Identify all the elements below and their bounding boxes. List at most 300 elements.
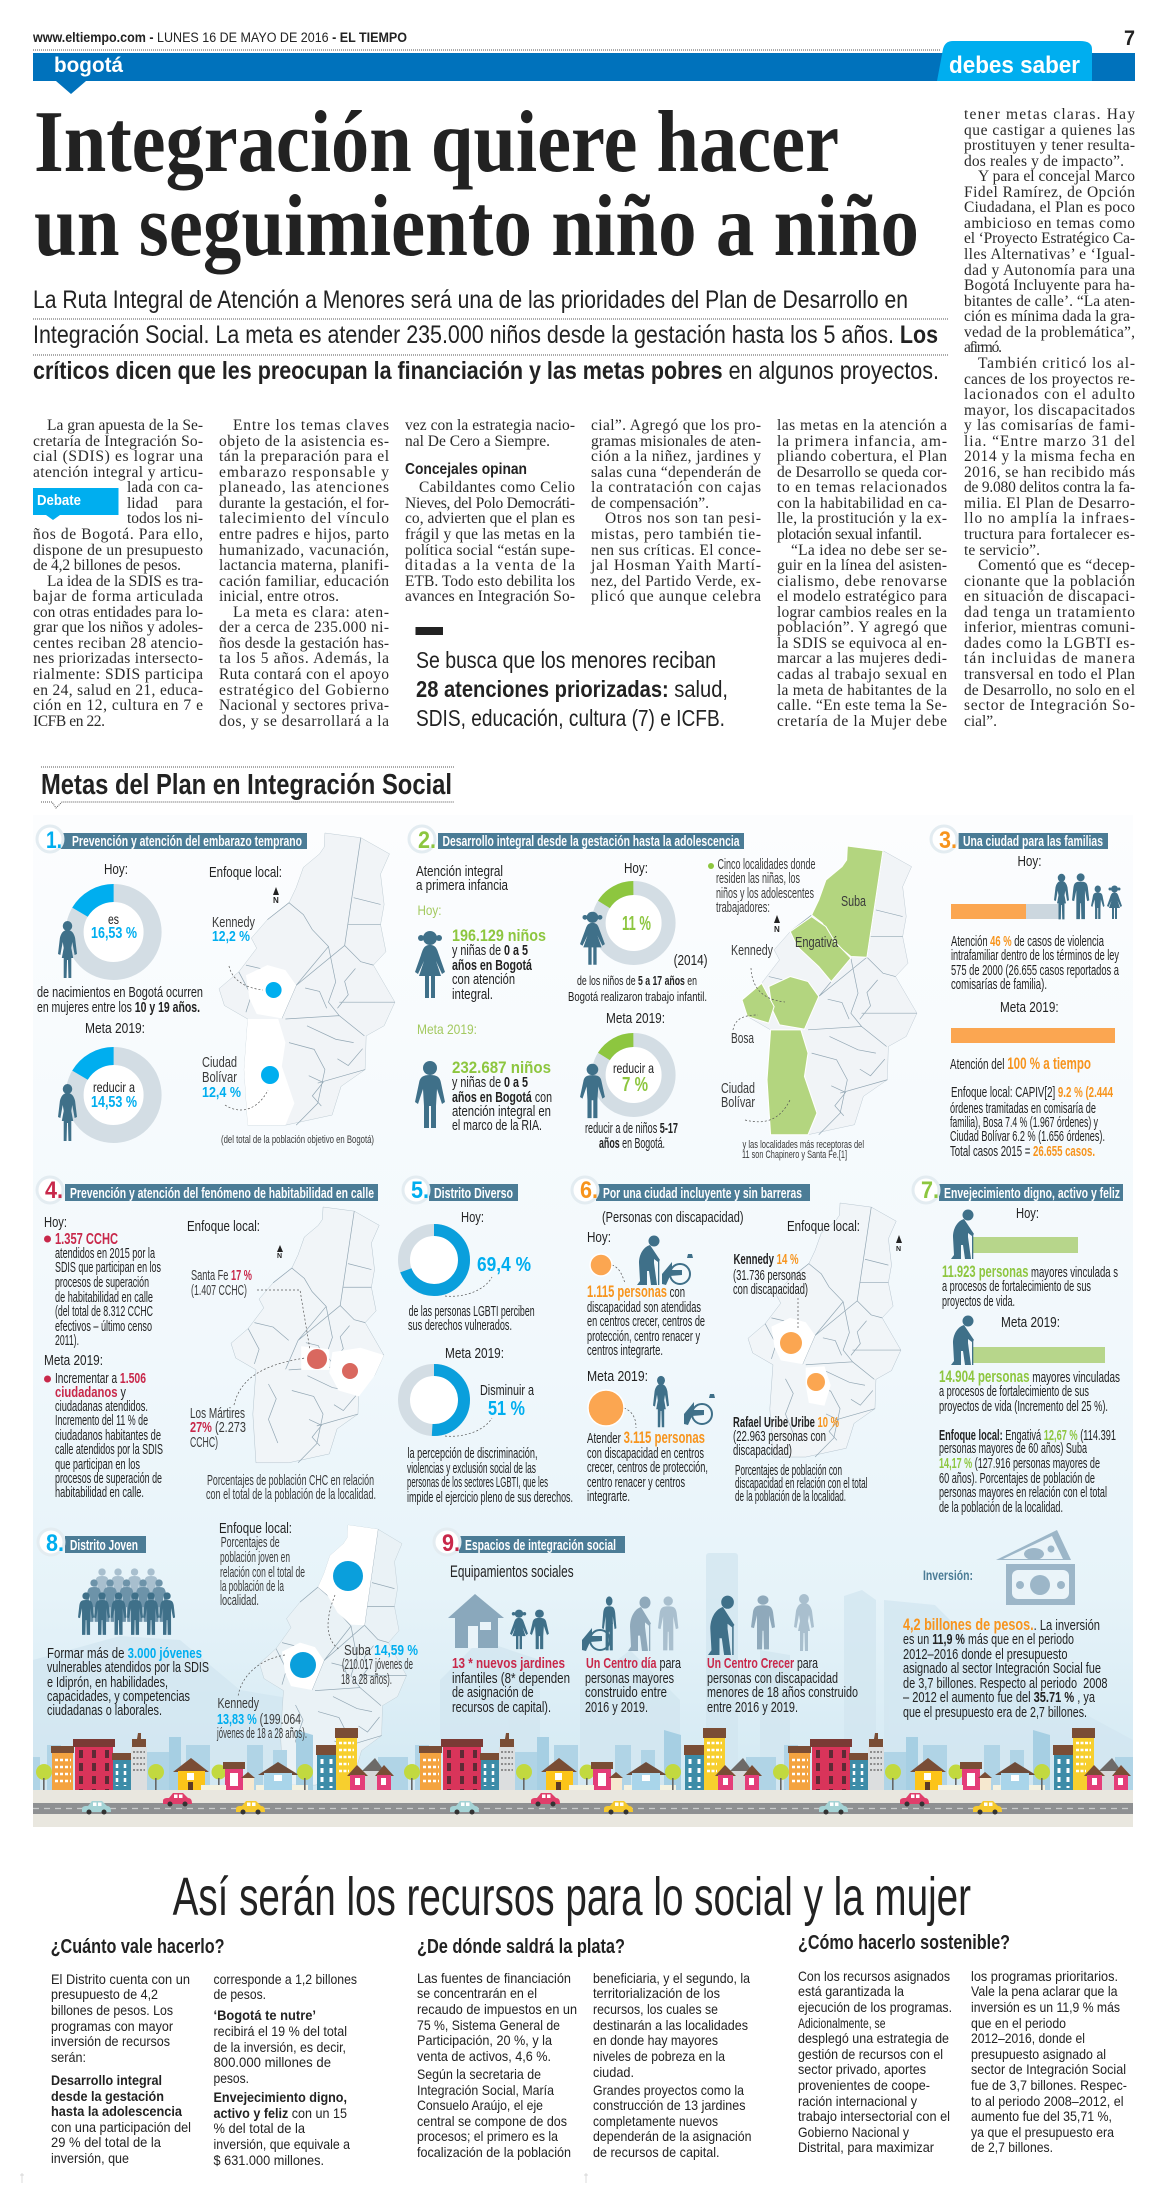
icon: house (448, 1594, 504, 1648)
article column 6: el ‘Proyecto Estratégico Ca- (964, 230, 1135, 247)
block: ¿Cómo hacerlo sostenible?: inversión es un 11,9 % más (971, 1999, 1120, 2015)
article column 2: Entre los temas claves (233, 417, 389, 434)
panel 9 text: personas con discapacidad (707, 1670, 838, 1687)
panel 8 header: Distrito Joven (70, 1538, 138, 1554)
donut hoy 11 %: 11 % (622, 913, 651, 935)
block: ¿De dónde saldrá la plata? (417, 1936, 752, 2160)
panel 8 map labels (216, 1520, 418, 1742)
panel 2 header: Desarrollo integral desde la gestación hasta la adolescencia (442, 834, 740, 850)
text: hoy y meta: calle atendidos por la SDIS (55, 1442, 163, 1458)
panel 6 text: protección, centro renacer y (587, 1329, 700, 1345)
panel 3 header: Una ciudad para las familias (963, 834, 1103, 850)
map labels: y las localidades más receptoras del (742, 1139, 864, 1151)
panel 6 text: discapacidad en relación con el total (735, 1476, 868, 1492)
panel 4 header: 4. (45, 1177, 63, 1204)
block: ¿Cómo hacerlo sostenible?: provenientes de coope- (798, 2077, 930, 2093)
block: ¿De dónde saldrá la plata?: recaudo de impuestos en un (417, 2001, 577, 2017)
article column 6: que castigar a quienes las (964, 122, 1135, 139)
icon: wheelchair (662, 1254, 693, 1285)
text: hoy y meta: 1.357 CCHC (55, 1231, 118, 1248)
panel 1 header: Prevención y atención del embarazo temprano (72, 834, 302, 850)
article column 5: lograr cambios reales en la (777, 604, 947, 621)
map labels: Bosa (731, 1030, 754, 1047)
article column 2: embarazo responsable y (219, 464, 389, 481)
article column 6: prostituyen y tener resulta- (964, 137, 1135, 154)
article column 4: cial”. Agregó que los pro- (591, 417, 761, 434)
panel 9 header: 9. (442, 1530, 460, 1557)
block: ¿Cómo hacerlo sostenible?: desplegó una estrategia de (798, 2030, 949, 2046)
map labels: Kennedy (731, 942, 773, 959)
donut meta 14,53 %: reducir a (93, 1080, 135, 1095)
text: hoy y meta: efectivos – último censo (55, 1319, 152, 1335)
article column 3: ditadas a la venta de la (405, 557, 575, 574)
article column 4: salas cuna “dependerán de (591, 464, 761, 481)
block: ¿De dónde saldrá la plata?: Integración Social, María (417, 2082, 554, 2098)
article column 1: La idea de la SDIS es tra- (47, 573, 203, 590)
panel 6 text: 1.115 personas con (587, 1282, 685, 1301)
text: formar jóvenes: ciudadanas o laborales. (47, 1702, 162, 1719)
panel 7 text: de la población de la localidad. (939, 1500, 1063, 1516)
article column 4: mistas, pero también tie- (591, 526, 761, 543)
tag: Debate: Debate (37, 492, 81, 509)
inversión text: es un 11,9 % más que en el periodo (903, 1631, 1074, 1648)
text: hoy y meta: de habitabilidad en calle (55, 1290, 153, 1306)
donut meta 14,53 %: 14,53 % (91, 1094, 137, 1111)
map labels: 12,4 % (202, 1085, 241, 1101)
panel 7 text: Enfoque local: Engativá 12,67 % (114.391 (939, 1428, 1116, 1444)
donut meta 7 % (585, 1027, 682, 1123)
bar hoy 46 % (951, 904, 1061, 919)
article column 2: durante la gestación, el for- (219, 495, 389, 512)
circle hoy (590, 1254, 612, 1276)
primera infancia text: Hoy: (418, 902, 442, 918)
block: ¿Cuánto vale hacerlo?: presupuesto de 4,2 (51, 1986, 158, 2002)
block: ¿Cuánto vale hacerlo?: corresponde a 1,2 billones (214, 1971, 357, 1987)
north arrow: N (277, 1253, 282, 1260)
article column 4 (590, 417, 761, 605)
subhead: La Ruta Integral de Atención a Menores será una de las prioridades del Plan de Desarrollo en (33, 286, 908, 314)
trabajo infantil text: Hoy: (624, 860, 648, 877)
block: ¿Cuánto vale hacerlo? (51, 1936, 357, 2168)
map labels: con el total de la población de la localidad. (206, 1487, 376, 1503)
panel 1 text block: de nacimientos en Bogotá ocurren (37, 985, 203, 1001)
article column 6: Bogotá Incluyente para ha- (964, 277, 1135, 294)
block: ¿De dónde saldrá la plata?: construcción de 13 jardines (593, 2097, 746, 2113)
article column 3: vez con la estrategia nacio- (405, 417, 575, 434)
primera infancia text: Meta 2019: (417, 1021, 477, 1037)
map labels: residen las niñas, los (716, 871, 800, 887)
donut meta 7 %: reducir a (613, 1060, 654, 1076)
article column 6: cial”. (964, 713, 997, 730)
article column 3: política social “están supe- (405, 542, 575, 559)
article column 1: cial (SDIS) es lograr una (33, 448, 203, 465)
panel 1 text block: en mujeres entre los 10 y 19 años. (37, 1000, 200, 1016)
text: hoy y meta: atendidos en 2015 por la (55, 1246, 156, 1262)
article column 1: lada con ca- (127, 479, 203, 496)
subheading: Concejales opinan: Concejales opinan (405, 461, 527, 478)
block: ¿Cuánto vale hacerlo?: de la inversión, es decir, (214, 2039, 346, 2055)
icon: group of young people (78, 1568, 175, 1635)
article column 6: dad y Autonomía para una (964, 262, 1135, 279)
panel 3 text: comisarías de familia). (951, 977, 1047, 993)
map labels: Kennedy (212, 915, 256, 931)
panel 6 text: con discapacidad) (733, 1282, 808, 1298)
panel 9 text: Un Centro Crecer para (707, 1655, 818, 1672)
panel 6 text: (Personas con discapacidad) (602, 1209, 744, 1226)
panel 6 header (572, 1177, 810, 1204)
panel 3 text: Atención del 100 % a tiempo (950, 1054, 1091, 1073)
block: ¿Cómo hacerlo sostenible?: Distrital, para maximizar (798, 2139, 934, 2155)
panel 4 header: Prevención y atención del fenómeno de habitabilidad en calle (70, 1186, 374, 1202)
article column 2: talecimiento del vínculo (219, 510, 389, 527)
article column 6: de Desarrollo, no solo en el (964, 682, 1135, 699)
north arrow: N (896, 1246, 901, 1253)
panel 8 map labels: población joven en (220, 1550, 290, 1566)
panel 9 text: 13 * nuevos jardines (452, 1655, 565, 1672)
panel 9 header: Espacios de integración social (465, 1538, 616, 1554)
block: ¿Cómo hacerlo sostenible?: presupuesto asignado al (971, 2046, 1106, 2062)
panel 9 text: de asignación de (452, 1684, 534, 1701)
town: buildings, trees and cars (0, 1728, 1145, 1814)
subhead: Integración Social. La meta es atender 235.000 niños desde la gestación hasta los 5 años. Los (33, 321, 938, 349)
panel 5 text: impide el ejercicio pleno de sus derechos. (407, 1490, 573, 1506)
article column 2 (219, 417, 389, 730)
article column 6: de 9.080 delitos contra la fa- (964, 479, 1135, 496)
primera infancia text: a primera infancia (416, 878, 509, 894)
map labels: 12,2 % (212, 929, 250, 945)
block: ¿Cómo hacerlo sostenible?: Vale la pena aclarar que la (971, 1983, 1118, 1999)
panel 1 text block: Meta 2019: (85, 1020, 145, 1037)
headline: un seguimiento niño a niño (34, 178, 919, 275)
section band: bogotá: bogotá (54, 54, 123, 77)
icon: woman (58, 921, 77, 978)
text: hoy y meta: (del total de 8.312 CCHC (55, 1304, 153, 1320)
panel 6 text: discapacidad son atendidas (587, 1300, 701, 1316)
inversión text: que el presupuesto era de 2,7 billones. (903, 1704, 1087, 1721)
article column 2: der a cerca de 235.000 ni- (219, 619, 389, 636)
block: ¿Cómo hacerlo sostenible?: 2012–2016, donde el (971, 2030, 1085, 2046)
primera infancia text: Atención integral (416, 864, 503, 880)
primera infancia text (416, 864, 552, 1134)
block: ¿Cómo hacerlo sostenible?: los programas prioritarios. (971, 1968, 1118, 1984)
block: ¿Cómo hacerlo sostenible?: de 2,7 billones. (971, 2139, 1053, 2155)
donut meta 14,53 % (60, 1042, 167, 1148)
panel 8 map labels: Kennedy (218, 1696, 260, 1712)
block: ¿Cuánto vale hacerlo?: inversión, que (51, 2150, 129, 2166)
text: hoy y meta: ciudadanas atendidos. (55, 1399, 148, 1415)
block: ¿De dónde saldrá la plata?: niveles de pobreza en la (593, 2048, 725, 2064)
subhead: críticos dicen que les preocupan la financiación y las metas pobres en algunos proyectos. (33, 357, 939, 385)
article column 1: centes reciban 28 atencio- (33, 635, 203, 652)
article column 6: dos reales y de impacto”. (964, 153, 1124, 170)
infographic background (33, 815, 1133, 1790)
article column 1: nes priorizadas intersecto- (33, 650, 203, 667)
trabajo infantil text: Meta 2019: (606, 1010, 665, 1027)
article column 2: lactancia materna, planifi- (219, 557, 389, 574)
article column 1: ICFB en 22. (33, 713, 105, 730)
panel 8 header: 8. (46, 1530, 64, 1557)
map labels: Enfoque local: (187, 1218, 260, 1235)
article column 1: de 4,2 billones de pesos. (33, 557, 181, 574)
text: formar jóvenes: vulnerables atendidos por la SDIS (47, 1659, 209, 1676)
article column 6: milia. El Plan de Desarro- (964, 495, 1135, 512)
panel 3 text: Meta 2019: (1000, 999, 1059, 1016)
inversión heading: Inversión: (923, 1567, 973, 1583)
callout: Se busca que los menores reciban (416, 647, 716, 673)
panel 8 header (38, 1529, 146, 1557)
icon: wheelchair user (684, 1394, 715, 1425)
article column 1: para (176, 495, 203, 512)
donut hoy 16,53 % (60, 879, 167, 985)
article column 6: Fidel Ramírez, de Opción (964, 184, 1135, 201)
panel 6 text (587, 1209, 868, 1505)
block: ¿De dónde saldrá la plata?: dependerán de la asignación (593, 2128, 752, 2144)
inversión text: – 2012 el aumento fue del 35.71 % , ya (903, 1689, 1095, 1706)
block: ¿Cuánto vale hacerlo?: % del total de la (214, 2120, 305, 2136)
map labels: (1.407 CCHC) (191, 1283, 247, 1299)
text: formar jóvenes: e Idiprón, en habilidades, (47, 1674, 168, 1691)
block: ¿De dónde saldrá la plata?: venta de activos, 4,6 %. (417, 2048, 551, 2064)
inversión text: 4,2 billones de pesos.. La inversión (903, 1615, 1100, 1634)
trabajo infantil text: Bogotá realizaron trabajo infantil. (568, 990, 707, 1004)
map labels: Ciudad (721, 1080, 755, 1097)
text: hoy y meta: ciudadanos habitantes de (55, 1428, 161, 1444)
block: ¿De dónde saldrá la plata?: Participación, 20 %, y la (417, 2032, 552, 2048)
article column 6: tructura para fortalecer es- (964, 526, 1135, 543)
block: ¿Cuánto vale hacerlo?: ¿Cuánto vale hacerlo? (51, 1936, 225, 1958)
headline: Integración quiere hacer (34, 94, 839, 191)
panel 6 text: discapacidad) (733, 1443, 792, 1459)
panel 6 text: Atender 3.115 personas (587, 1428, 705, 1447)
block: ¿Cuánto vale hacerlo?: ‘Bogotá te nutre’ (214, 2007, 316, 2023)
panel 6 text: Kennedy 14 % (734, 1252, 799, 1268)
block: ¿De dónde saldrá la plata?: completamente nuevos (593, 2113, 718, 2129)
article column 5: cretaría de la Mujer debe (777, 713, 947, 730)
panel 7 text (939, 1205, 1120, 1516)
article column 1: todos los ni- (127, 510, 203, 527)
panel 6: ciudad incluyente (572, 1177, 902, 1505)
article column 1: rialmente: SDIS participa (33, 666, 203, 683)
article column 3: co, advierten que el plan es (405, 510, 575, 527)
article column 5: la meta de habitantes de la (777, 682, 947, 699)
skyline backdrop (33, 1553, 1133, 1790)
icon: family (1054, 873, 1122, 919)
panel 9 text: 2016 y 2019. (585, 1699, 648, 1716)
panel 6 text: Hoy: (587, 1229, 611, 1246)
article column 2: cación familiar, educación (219, 573, 389, 590)
article column 6: inferior, mientras comuni- (964, 619, 1135, 636)
article column 3: ETB. Todo esto debilita los (405, 573, 575, 590)
bar hoy (972, 1237, 1078, 1253)
block: ¿De dónde saldrá la plata?: recursos, los cuales se (593, 2001, 718, 2017)
icon: children (510, 1610, 549, 1649)
text: formar jóvenes: capacidades, y competencias (47, 1688, 190, 1705)
donut 69,4 % (404, 1230, 464, 1290)
callout: SDIS, educación, cultura (7) e ICFB. (416, 705, 725, 731)
donut 51 % (404, 1370, 464, 1430)
panel 8 map labels: 18 a 28 años). (341, 1672, 392, 1688)
article column 1: con otras entidades para lo- (33, 604, 203, 621)
panel 7 text: Meta 2019: (1001, 1314, 1060, 1331)
map: Kennedy y Ciudad Bolívar (219, 833, 395, 1125)
block: ¿Cómo hacerlo sostenible?: sector privado, aportes (798, 2061, 926, 2077)
panel 8 map labels: (210.017 jóvenes de (342, 1657, 413, 1673)
north arrow: N (774, 925, 780, 934)
article column 1: en 24, salud en 21, educa- (33, 682, 203, 699)
article column 5: lle, la prostitución y la ex- (777, 510, 947, 527)
text: hoy y meta: Hoy: (44, 1214, 67, 1231)
article column 4: ción a la niñez, jardines y (591, 448, 761, 465)
block: ¿De dónde saldrá la plata?: Según la secretaria de (417, 2066, 541, 2082)
primera infancia text: años en Bogotá (452, 958, 533, 974)
primera infancia text: atención integral en (452, 1104, 551, 1120)
donut hoy 16,53 %: 16,53 % (91, 925, 137, 942)
tab: debes saber (937, 41, 1092, 81)
article column 1: bajar de forma articulada (33, 588, 203, 605)
panel 5 header (403, 1177, 518, 1204)
block: ¿Cuánto vale hacerlo?: serán: (51, 2049, 86, 2065)
article column 2: estratégico del Gobierno (219, 682, 389, 699)
panel 7 text: 11.923 personas mayores vinculada s (942, 1262, 1118, 1281)
article column 6: lia. “Entre marzo 31 del (964, 433, 1135, 450)
article column 1: cretaría de Integración So- (33, 433, 203, 450)
article column 2: planeado, las atenciones (219, 479, 389, 496)
article column 2: objeto de la asistencia es- (219, 433, 389, 450)
article column 2: ños desde la gestación has- (219, 635, 389, 652)
panel 9: espacios de integración (434, 1529, 1108, 1721)
block: ¿Cuánto vale hacerlo?: 29 % del total de la (51, 2134, 161, 2150)
article column 4: plicó que aunque celebra (591, 588, 761, 605)
panel 3 header (931, 826, 1108, 854)
article column 2: La meta es clara: aten- (233, 604, 389, 621)
panel 9 text (450, 1562, 858, 1716)
panel 9 text: entre 2016 y 2019. (707, 1699, 798, 1716)
panel 5: distrito diverso (403, 1177, 573, 1506)
block: ¿Cuánto vale hacerlo?: de pesos. (214, 1986, 266, 2002)
map labels: Los Mártires (190, 1406, 245, 1422)
article column 3 (405, 417, 575, 605)
block: ¿Cuánto vale hacerlo?: $ 631.000 millones. (214, 2152, 324, 2168)
article column 1: ños de Bogotá. Para ello, (33, 526, 203, 543)
article column 3: Nieves, del Polo Democráti- (405, 495, 575, 512)
article column 5: calle. “En este tema la Se- (777, 697, 947, 714)
panel 4: habitabilidad en calle (37, 1177, 384, 1503)
panel 5 text: Disminuir a (480, 1382, 534, 1399)
primera infancia text: integral. (452, 987, 493, 1003)
inversión text: 2012–2016 donde el presupuesto (903, 1646, 1068, 1663)
panel 3 header: 3. (939, 827, 957, 854)
primera infancia text: 196.129 niños (452, 927, 546, 945)
panel 5 text: de las personas LGBTI perciben (409, 1304, 535, 1320)
block: ¿De dónde saldrá la plata?: ¿De dónde saldrá la plata? (417, 1936, 625, 1958)
map labels: CCHC) (190, 1435, 218, 1451)
panel 2 header (409, 826, 744, 854)
callout (416, 627, 728, 731)
text: hoy y meta: Incremento del 11 % de (55, 1413, 148, 1429)
article column 5: pliando cobertura, el Plan (777, 448, 947, 465)
panel 6 text: centro renacer y centros (587, 1475, 685, 1491)
article column 6: llo no amplía la infraes- (964, 510, 1135, 527)
article column 4: Otros nos son tan pesi- (605, 510, 761, 527)
block: ¿Cómo hacerlo sostenible? (798, 1932, 1127, 2155)
block: ¿Cuánto vale hacerlo?: programas con mayor (51, 2018, 173, 2034)
bar meta (972, 1347, 1105, 1363)
article column 6: transversal en todo el Plan (964, 666, 1135, 683)
panel 5 text: la percepción de discriminación, (408, 1446, 538, 1462)
primera infancia text: con atención (452, 972, 515, 988)
article column 4: de compensación”. (591, 495, 709, 512)
panel 5 text: personas de los sectores LGBTI, que les (407, 1475, 548, 1491)
article column 4: gramas misionales de aten- (591, 433, 761, 450)
article column 2: inicial, entre otros. (219, 588, 339, 605)
primera infancia text: y niñas de 0 a 5 (452, 943, 528, 959)
block: ¿De dónde saldrá la plata?: focalización de la población (417, 2144, 571, 2160)
panel 9 text: infantiles (8* dependen (452, 1670, 570, 1687)
map labels: Bolívar (721, 1094, 755, 1111)
panel 9 text: Equipamientos sociales (450, 1562, 574, 1581)
article column 5: guir en la línea del asisten- (777, 557, 947, 574)
callout: 28 atenciones priorizadas: salud, (416, 676, 728, 702)
panel 6 header: Por una ciudad incluyente y sin barreras (603, 1186, 802, 1202)
article column 4: nen sus críticas. El conce- (591, 542, 761, 559)
article column 6: y las comisarías de fami- (964, 417, 1135, 434)
map: Kennedy y Rafael Uribe (612, 1203, 901, 1457)
block: ¿De dónde saldrá la plata?: central se compone de dos (417, 2113, 567, 2129)
article column 6: Comentó que es “decep- (978, 557, 1135, 574)
north arrow: N (273, 896, 279, 905)
map labels: trabajadores: (716, 900, 770, 916)
article column 6: te servicio”. (964, 542, 1040, 559)
panel 1 header (37, 826, 307, 854)
article column 5: marcar a las mujeres dedi- (777, 650, 947, 667)
map labels: 11 son Chapinero y Santa Fe.[1] (742, 1149, 847, 1161)
text: hoy y meta (44, 1214, 163, 1501)
text: hoy y meta: que participan en los (55, 1457, 140, 1473)
map labels: (del total de la población objetivo en Bogotá) (221, 1134, 374, 1146)
tab: debes saber: debes saber (949, 52, 1080, 79)
panel 5 text: violencias y exclusión social de las (407, 1461, 536, 1477)
article column 1: La gran apuesta de la Se- (47, 417, 203, 434)
map labels: Porcentajes de población CHC en relación (207, 1473, 374, 1489)
article column 5: “La idea no debe ser se- (791, 542, 947, 559)
panel 6 text: (31.736 personas (733, 1268, 806, 1284)
article column 6: sector de Integración So- (964, 697, 1135, 714)
north arrow (774, 915, 780, 934)
article column 6: dad tenga un tratamiento (964, 604, 1135, 621)
panel 1 text block: Hoy: (104, 861, 128, 878)
block: ¿De dónde saldrá la plata?: territorialización de los (593, 1985, 720, 2001)
text: hoy y meta: habitabilidad en calle. (55, 1485, 144, 1501)
panel 9 text: menores de 18 años construido (707, 1684, 858, 1701)
panel 6 text: con discapacidad en centros (587, 1446, 704, 1462)
panel 8 map labels: localidad. (220, 1593, 259, 1609)
text: formar jóvenes: Formar más de 3.000 jóvenes (47, 1645, 202, 1662)
panel 5 text (407, 1209, 573, 1506)
bar meta 100 % (951, 1028, 1115, 1043)
block: ¿Cómo hacerlo sostenible?: gestión de recursos con el (798, 2046, 943, 2062)
panel 6 text: (22.963 personas con (733, 1429, 826, 1445)
panel 3 text: Enfoque local: CAPIV[2] 9.2 % (2.444 (951, 1085, 1113, 1101)
map: Santa Fe y Los Mártires (231, 1207, 384, 1463)
text: hoy y meta: procesos de superación (55, 1275, 149, 1291)
icon: person with crutch (653, 1376, 669, 1427)
article column 5: las metas en la atención a (777, 417, 947, 434)
article column 6: cionante que la población (964, 573, 1135, 590)
article column 6: afirmó. (964, 339, 1002, 356)
panel 9 text: recursos de capital). (452, 1699, 551, 1716)
text: hoy y meta: Incrementar a 1.506 (55, 1370, 146, 1387)
panel 3 text (950, 853, 1120, 1160)
